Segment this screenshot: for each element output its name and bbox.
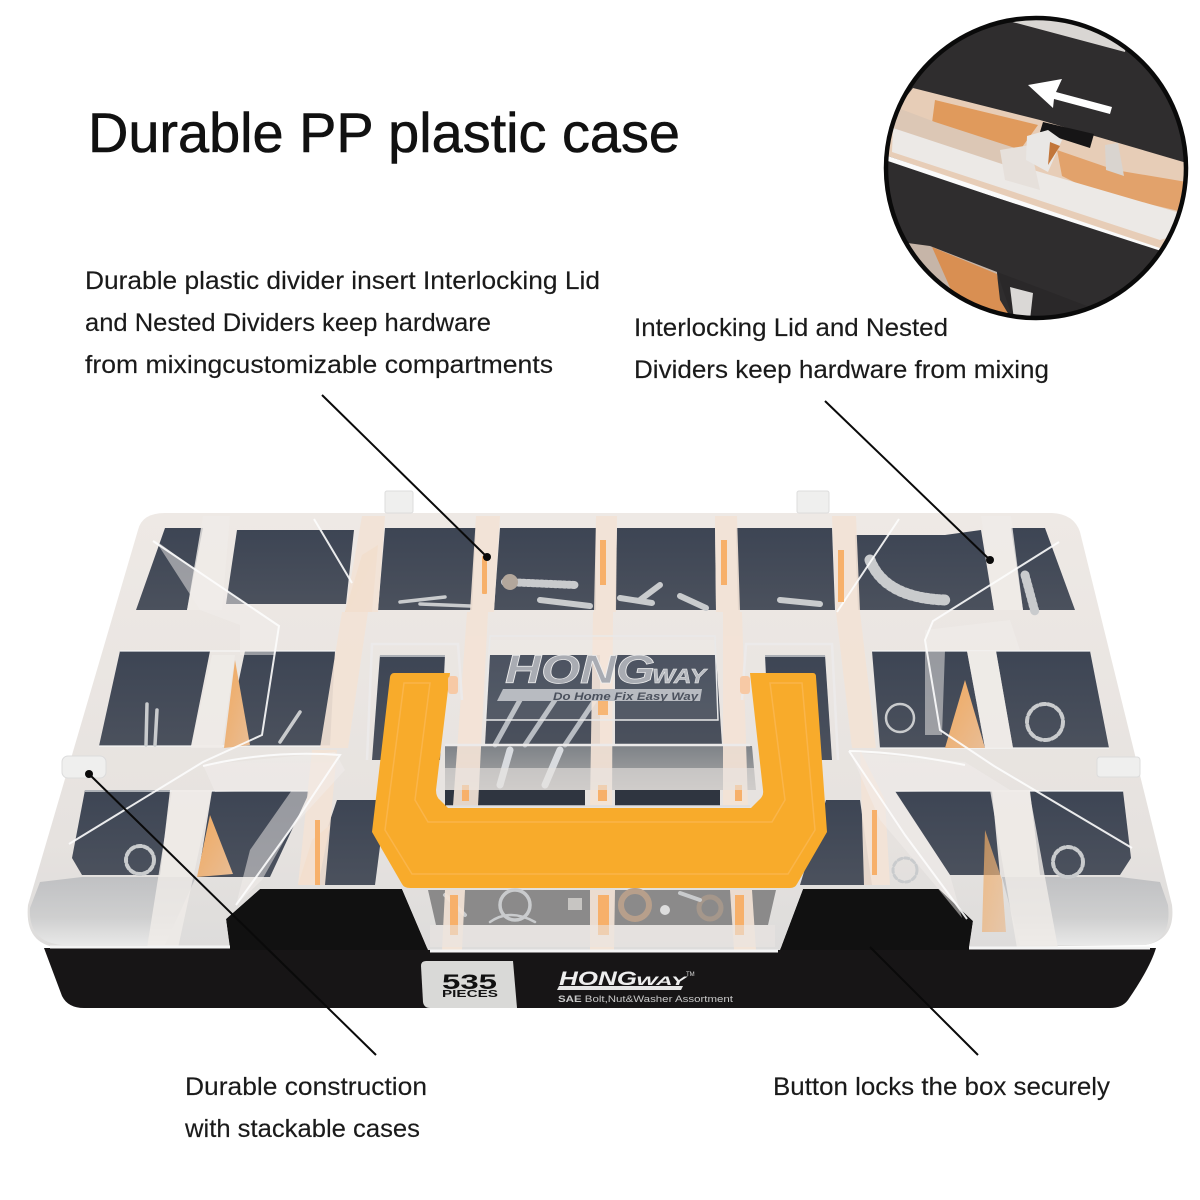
handle hinge pegs (448, 676, 750, 694)
hardware: screws and bolts seen through the lid (126, 560, 1083, 922)
text: interlocking lid description: Interlocking Lid and Nested (634, 314, 948, 342)
lid corner shading (30, 877, 1169, 945)
product label: 535 pieces: 535 (442, 971, 497, 994)
text: divider insert description (85, 267, 600, 379)
text: stackable cases description (184, 1073, 427, 1143)
logo panel on the inner insert: HONG (505, 648, 655, 692)
product label: 535 pieces: PIECES (442, 989, 498, 1000)
leader line: button lock (870, 947, 978, 1055)
translucent diagonal panels (155, 540, 1020, 918)
logo panel on the inner insert: WAY (652, 666, 708, 688)
storage case (28, 491, 1172, 1008)
text: stackable cases description: with stackable cases (184, 1115, 420, 1143)
orange strips in the lid dividers (315, 540, 877, 935)
leader line: stackable cases (85, 770, 376, 1055)
lid lip highlight (50, 947, 1150, 951)
compartment top highlights (85, 651, 1123, 791)
logo panel on the inner insert (485, 636, 718, 720)
printed brand logo: HONG (559, 969, 637, 990)
inset circle: latch close-up (880, 10, 1195, 330)
text: divider insert description: Durable plastic divider insert Interlocking Lid (85, 267, 600, 295)
bottom row compartments (72, 790, 1131, 925)
text: divider insert description: and Nested Dividers keep hardware (85, 309, 491, 337)
text: interlocking lid description (634, 314, 1049, 384)
black recess bands beside the centre (226, 889, 973, 950)
leader line: divider insert (322, 395, 491, 561)
text: stackable cases description: Durable construction (185, 1073, 427, 1101)
tabs on the lid edge (62, 491, 1140, 778)
printed brand logo: TM (686, 972, 695, 978)
vertical peach lid dividers (298, 516, 890, 950)
logo panel on the inner insert: Do Home Fix Easy Way (553, 691, 699, 703)
text: button lock description: Button locks the box securely (773, 1073, 1111, 1101)
orange tray dividers behind the lid (197, 545, 1006, 932)
centre window floor with bolts (445, 746, 756, 790)
lighter horizontal lid bands (430, 768, 775, 947)
printed brand logo: SAE Bolt,Nut&Washer Assortment (558, 994, 734, 1004)
clear windows either side of the handle (367, 644, 838, 806)
text: divider insert description: from mixingcustomizable compartments (85, 351, 553, 379)
lid: translucent plastic shell (28, 513, 1172, 950)
text: interlocking lid description: Dividers keep hardware from mixing (634, 356, 1049, 384)
leader line: interlocking lid (825, 401, 994, 564)
thin white diagonal edges (69, 519, 1132, 919)
middle row compartments (99, 651, 1109, 760)
product label: 535 pieces (421, 961, 517, 1008)
top row compartments (136, 528, 1075, 610)
title: Durable PP plastic case (88, 101, 680, 164)
printed brand logo: WAY (636, 974, 688, 988)
base: black lower tray (44, 948, 1156, 1008)
printed brand logo (557, 969, 734, 1004)
clear lid dividers (147, 516, 1058, 948)
orange carry handle (372, 673, 827, 888)
